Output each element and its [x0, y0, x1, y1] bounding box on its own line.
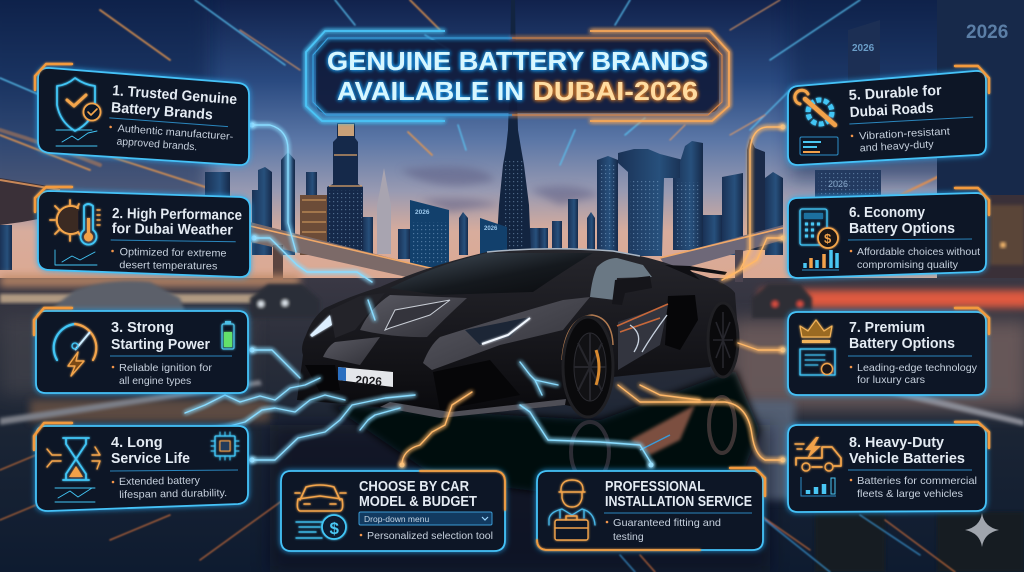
panel 5: durable for dubai roads — [788, 66, 989, 165]
heading and description: compromising quality — [857, 260, 959, 271]
heading and description — [110, 206, 242, 273]
panel 2: high performance for dubai weather — [35, 187, 250, 277]
spire tower right — [747, 138, 765, 250]
mini bar chart — [802, 250, 839, 270]
heading and description: Starting Power — [111, 337, 210, 353]
icon: crown — [800, 320, 832, 343]
panel 7: premium battery options — [788, 308, 989, 395]
heading and description: Service Life — [111, 451, 190, 467]
mini line chart — [56, 130, 97, 146]
blue connectors and lightning — [185, 125, 651, 463]
pale spire tower — [377, 168, 391, 254]
heading and description: 8. Heavy-Duty — [849, 435, 944, 451]
distant towers — [0, 152, 783, 270]
heading and description: Dubai Roads — [849, 100, 934, 121]
heading and description: 6. Economy — [849, 205, 925, 221]
icon: shield with check — [57, 78, 100, 131]
side graphic — [618, 305, 668, 370]
title text — [327, 48, 708, 106]
heading and description — [107, 83, 238, 156]
side mirror — [612, 276, 652, 305]
heading and description: 1. Trusted Genuine — [112, 83, 238, 108]
roof highlight — [487, 249, 640, 256]
hood emblem — [385, 300, 450, 330]
main left skyscraper — [327, 123, 363, 254]
wheel arch highlight — [562, 315, 613, 360]
skyline of Dubai — [0, 0, 1024, 285]
heading and description: fleets & large vehicles — [857, 489, 963, 500]
heading: MODEL & BUDGET — [359, 494, 477, 510]
car body — [297, 249, 738, 418]
glass buildings with 2026: 2026 — [415, 209, 430, 216]
licence plate — [338, 367, 393, 389]
title text: AVAILABLE IN — [337, 78, 524, 106]
heading and description: Vehicle Batteries — [849, 451, 965, 467]
icon: calculator and coin — [800, 209, 838, 248]
electric connectors and lightning — [185, 125, 783, 465]
heading and description: and heavy-duty — [859, 139, 935, 154]
heading and description — [604, 479, 752, 543]
description: Personalized selection tool — [367, 531, 493, 542]
heading and description: Vibration-resistant — [859, 126, 950, 142]
heading — [359, 479, 477, 510]
mini line chart — [55, 250, 97, 265]
heading and description: lifespan and durability. — [119, 488, 227, 501]
panel: professional installation service — [537, 468, 765, 550]
heading and description: PROFESSIONAL — [605, 479, 705, 495]
icon: electric truck — [795, 437, 841, 471]
mini bar chart — [801, 477, 836, 496]
heading and description: Battery Options — [849, 221, 955, 237]
heading and description: Guaranteed fitting and — [613, 518, 721, 529]
heading and description: all engine types — [119, 376, 191, 387]
title text: DUBAI-2026 — [533, 78, 698, 106]
heading and description — [110, 320, 232, 387]
heading and description — [848, 435, 977, 500]
panel: choose by car model and budget — [281, 471, 505, 551]
rear wing — [665, 265, 727, 280]
heading and description: approved brands. — [116, 136, 198, 153]
side intake — [665, 295, 698, 350]
panel 1: trusted genuine battery brands — [35, 64, 249, 165]
glass buildings with 2026: 2026 — [852, 43, 875, 54]
side window — [590, 258, 652, 300]
heading and description: Optimized for extreme — [119, 247, 227, 260]
panel 6: economy battery options — [788, 188, 989, 278]
icon: technician with toolbox — [549, 480, 595, 540]
heading and description: 7. Premium — [849, 320, 925, 336]
glass buildings with 2026: 2026 — [484, 226, 498, 232]
sports car — [297, 249, 738, 418]
icon: hourglass with circuit — [47, 438, 100, 480]
icon: speedometer and bolt — [54, 324, 96, 376]
heading and description: 5. Durable for — [848, 83, 942, 104]
glass buildings with 2026 — [410, 0, 1024, 285]
heading and description: for luxury cars — [857, 375, 925, 386]
icon: microchip — [211, 432, 239, 460]
connector nodes — [250, 122, 786, 468]
panel 4: long service life — [34, 423, 248, 511]
title panel — [306, 31, 729, 121]
panel 8: heavy-duty vehicle batteries — [788, 422, 989, 512]
icon: certificate — [800, 349, 835, 375]
twin bridged towers — [597, 141, 703, 256]
road light trails and reflections — [0, 275, 1024, 572]
heading and description — [848, 320, 978, 386]
heading and description: testing — [613, 532, 644, 543]
ground: wet road — [0, 278, 1024, 572]
heading and description: Affordable choices without — [857, 247, 980, 258]
heading and description: Authentic manufacturer- — [117, 124, 234, 143]
licence plate: 2026 — [355, 373, 383, 389]
hood highlights — [360, 295, 467, 337]
heading and description — [847, 81, 975, 155]
drop-down menu — [359, 512, 492, 525]
orange connectors and lightning — [402, 127, 783, 465]
windshield — [390, 253, 593, 295]
icon: sun and thermometer — [50, 200, 100, 245]
icon: car front — [295, 485, 346, 511]
icon: calculator and coin: $ — [824, 231, 832, 246]
icon: wrench and gear — [795, 90, 835, 125]
watermark sparkle — [965, 513, 999, 547]
heading: CHOOSE BY CAR — [359, 479, 469, 495]
heading and description: Battery Options — [849, 336, 955, 352]
heading and description: desert temperatures — [119, 260, 217, 272]
rear wheel — [708, 303, 738, 377]
heading and description — [848, 205, 980, 271]
background cars — [50, 281, 812, 318]
heading and description: 3. Strong — [111, 320, 174, 336]
heading and description: for Dubai Weather — [112, 221, 233, 239]
Burj Khalifa tower — [496, 0, 531, 254]
front wheel — [563, 317, 613, 417]
title text: GENUINE BATTERY BRANDS — [327, 48, 708, 76]
heading and description: Batteries for commercial — [857, 476, 977, 487]
car reflection on wet road — [330, 370, 760, 505]
icon: document and dollar coin — [296, 515, 346, 539]
background: left and right sky shading — [0, 0, 1024, 212]
mini bar panel — [800, 137, 838, 155]
drop-down menu: Drop-down menu — [364, 514, 429, 524]
icon: document and dollar coin: $ — [330, 519, 340, 538]
heading and description — [110, 435, 238, 501]
heading and description: Extended battery — [119, 476, 201, 488]
background: dusk sky — [0, 0, 1024, 290]
background: light streaks in sky — [0, 0, 1024, 230]
headlights — [465, 317, 530, 345]
heading and description: 4. Long — [111, 435, 163, 451]
gold lit building — [300, 195, 328, 255]
heading and description: Leading-edge technology — [857, 363, 978, 374]
heading and description: INSTALLATION SERVICE — [605, 494, 752, 510]
heading and description: 2. High Performance — [112, 206, 242, 224]
glass buildings with 2026: 2026 — [828, 179, 848, 189]
heading and description: Reliable ignition for — [119, 363, 213, 374]
mini line chart — [55, 488, 95, 502]
glass buildings with 2026: 2026 — [966, 22, 1008, 43]
icon: battery — [222, 321, 234, 349]
heading and description: Battery Brands — [110, 100, 213, 123]
front grille — [305, 360, 520, 410]
elevated highways — [0, 178, 1024, 282]
panel 3: strong starting power — [34, 308, 248, 393]
